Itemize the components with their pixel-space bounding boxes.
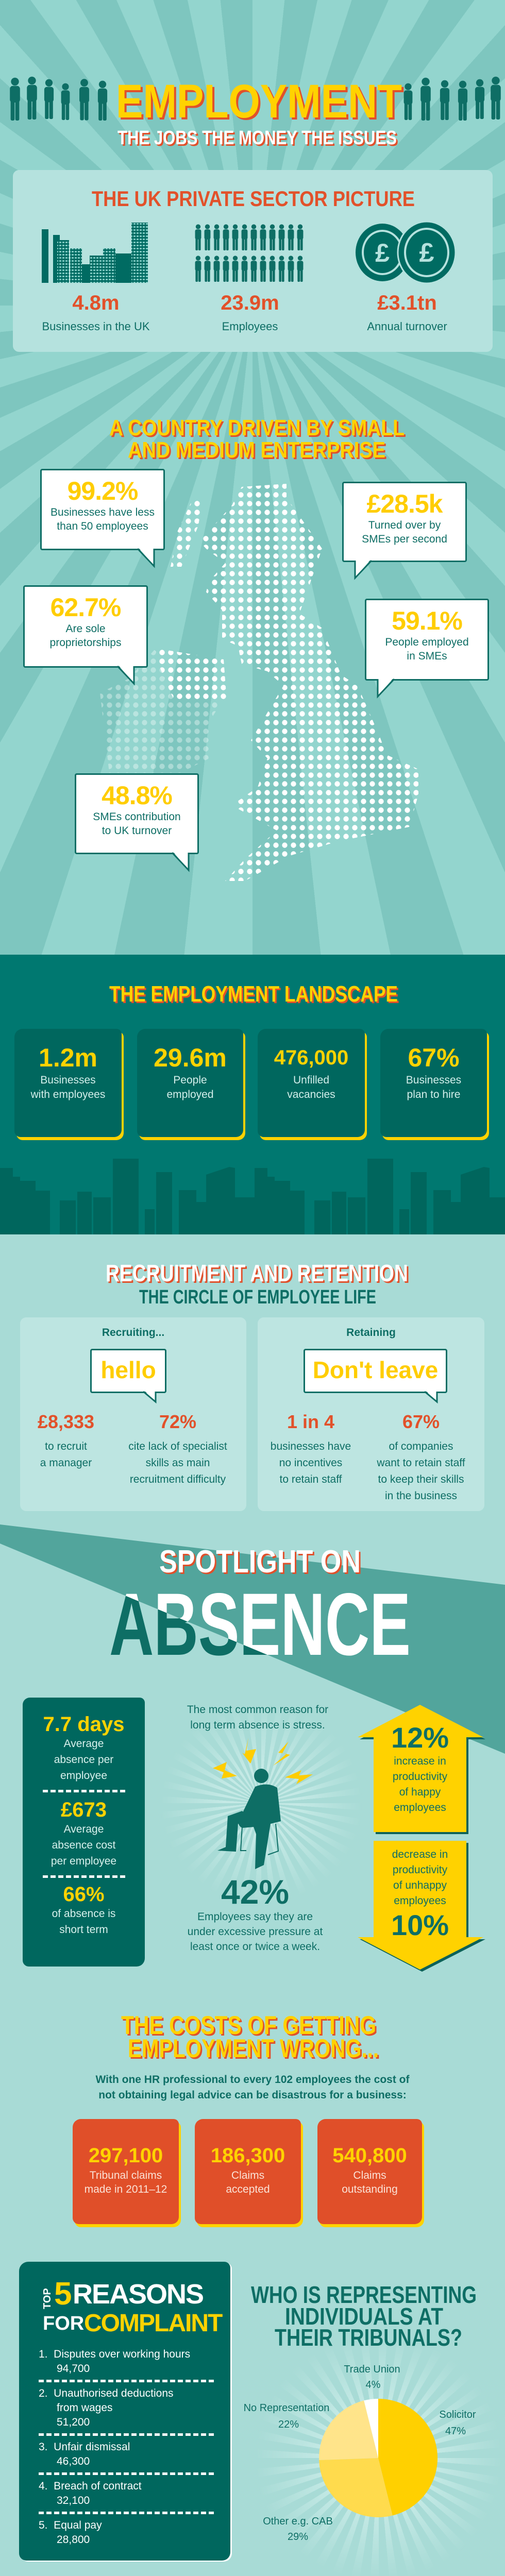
stat: 67% retain (377, 1411, 465, 1502)
heading: who is representing: THEIR TRIBUNALS? (275, 2324, 462, 2351)
heading: who is representing: INDIVIDUALS AT (285, 2303, 443, 2330)
text: stress reason (187, 1704, 328, 1731)
pie labels: Trade Union (344, 2364, 400, 2375)
callout: 62.7%: Are sole (65, 623, 106, 635)
red box: 186,300: 186,300 (211, 2144, 285, 2167)
landscape box: 1.2m: Businesses (40, 1074, 96, 1086)
callout: 62.7%: 62.7% (50, 593, 121, 622)
rays behind pie chart (276, 2355, 482, 2561)
stat: annual turnover: Annual turnover (367, 320, 447, 333)
list: reasons: 51,200 (57, 2416, 90, 2428)
landscape box: 476,000 (258, 1029, 365, 1137)
skyline (0, 1159, 505, 1234)
icon: employees crowd (195, 224, 303, 282)
landscape box: 1.2m: with employees (31, 1089, 105, 1100)
list: reasons: 3. Unfair dismissal (39, 2441, 130, 2453)
stat: £8,333: to recruit (45, 1440, 87, 1452)
red box: 540,800 (317, 2119, 422, 2224)
stat: 67% retain: of companies (389, 1440, 453, 1452)
heading: employment landscape: THE EMPLOYMENT LANDSCAPE (111, 983, 399, 1008)
panel heading: top 5 reasons: 5 (54, 2276, 72, 2312)
heading: a country driven by SMEs: AND MEDIUM ENTERPRISE (128, 437, 385, 463)
stat: 42% (188, 1873, 323, 1953)
label: retaining: Retaining (346, 1327, 396, 1338)
text: HR professional intro (96, 2074, 410, 2101)
stat: 42%: 42% (221, 1873, 289, 1911)
landscape box: 476,000: 476,000 (274, 1046, 348, 1069)
stat: businesses in the UK: 4.8m (72, 292, 120, 314)
callout: 62.7%: proprietorships (50, 637, 121, 649)
people row right of title (404, 77, 501, 121)
pie labels: Solicitor (439, 2409, 476, 2420)
background: employment landscape dark band (0, 955, 505, 1234)
panel: absence stats: £673 (61, 1799, 107, 1821)
heading: costs of getting employment wrong: THE COSTS OF GETTING (123, 2012, 378, 2041)
landscape box: 29.6m (137, 1029, 243, 1137)
panel: absence stats: short term (59, 1924, 108, 1936)
stat: 1 in 4: to retain staff (279, 1473, 342, 1485)
heading: costs of getting employment wrong: EMPLOYMENT WRONG... (129, 2036, 380, 2064)
callout: 48.8%: SMEs contribution (93, 811, 181, 823)
text: 10% decrease: employees (394, 1895, 446, 1907)
text: 10% decrease: productivity (393, 1864, 447, 1876)
landscape box: 476,000: Unfilled (293, 1074, 329, 1086)
landscape box: 29.6m: People (173, 1074, 207, 1086)
stat: employees: 23.9m (221, 292, 279, 314)
red box: 297,100: 297,100 (89, 2144, 163, 2167)
stat: businesses in the UK: Businesses in the UK (42, 320, 150, 333)
list: reasons: 46,300 (57, 2455, 90, 2467)
panel: retaining (258, 1317, 484, 1511)
red box: 186,300: Claims (231, 2170, 264, 2181)
list: reasons: 94,700 (57, 2363, 90, 2375)
arrow: down (10%) (358, 1841, 485, 1972)
title: EMPLOYMENT: EMPLOYMENT (118, 77, 404, 130)
stat: £8,333 (38, 1411, 94, 1469)
panel: absence stats: per employee (51, 1855, 116, 1867)
red box: 297,100 (73, 2119, 179, 2224)
icon: stressed seated person (217, 1769, 281, 1869)
callout: 99.2%: Businesses have less (50, 506, 155, 518)
callout: 59.1%: 59.1% (392, 606, 462, 635)
text: 12% increase: productivity (393, 1771, 447, 1783)
list: reasons: 5. Equal pay (39, 2519, 102, 2531)
icon: pound coins: £ (375, 239, 390, 267)
callout: 48.8% (75, 773, 199, 854)
stat: employees (221, 292, 279, 333)
red box: 297,100: Tribunal claims (90, 2170, 162, 2181)
landscape box: 67%: 67% (408, 1043, 460, 1072)
landscape box: 67% (380, 1029, 487, 1137)
landscape box: 29.6m: 29.6m (154, 1043, 227, 1072)
red box: 540,800: 540,800 (332, 2144, 407, 2167)
text: 12% increase (391, 1721, 449, 1814)
text: 12% increase: increase in (394, 1755, 446, 1767)
panel: absence stats (23, 1698, 145, 1967)
stat: annual turnover: £3.1tn (377, 292, 437, 314)
text: HR professional intro: With one HR professional to every 102 employees the cost of (96, 2074, 409, 2086)
callout: 62.7% (23, 585, 148, 668)
heading: costs of getting employment wrong (121, 2011, 380, 2064)
pie labels: 47% (445, 2426, 466, 2437)
subheading: circle of employee life: THE CIRCLE OF EMPLOYEE LIFE (139, 1286, 376, 1308)
panel: absence stats: 7.7 days (43, 1713, 124, 1736)
callout: 48.8%: to UK turnover (102, 825, 172, 837)
stat: £8,333: a manager (40, 1457, 92, 1469)
red box: 186,300: accepted (226, 2183, 270, 2195)
stat: £8,333: £8,333 (38, 1411, 94, 1432)
panel: absence stats: absence per (54, 1754, 113, 1766)
map: dotted UK (100, 484, 418, 881)
heading: ABSENCE (111, 1593, 408, 1656)
spotlight beam (0, 1524, 505, 1754)
text: 12% increase: 12% (391, 1721, 449, 1754)
callout: 99.2% (40, 469, 165, 550)
rays behind stressed figure (179, 1721, 343, 1885)
landscape box: 29.6m: employed (166, 1089, 214, 1100)
heading: recruitment and retention: RECRUITMENT AND RETENTION (106, 1260, 408, 1286)
pie labels: 4% (366, 2379, 381, 2391)
subtitle: THE JOBS THE MONEY THE ISSUES (117, 127, 397, 149)
red box: 540,800: outstanding (342, 2183, 398, 2195)
stat: employees: Employees (222, 320, 278, 333)
text: 10% decrease: decrease in (392, 1849, 448, 1860)
stat: 72% (128, 1411, 227, 1485)
text: stress reason: long term absence is stress. (190, 1719, 325, 1731)
panel heading: top 5 reasons (42, 2276, 223, 2337)
list: reasons: 32,100 (57, 2495, 90, 2506)
heading: recruitment and retention: RECRUITMENT AND RETENTION (107, 1261, 410, 1288)
heading: employment landscape: THE EMPLOYMENT LANDSCAPE (109, 981, 398, 1007)
text: HR professional intro: not obtaining legal advice can be disastrous for a business: (98, 2089, 407, 2101)
background: sunburst top section (0, 0, 505, 955)
stat: 72%: recruitment difficulty (130, 1473, 226, 1485)
callout: £28.5k: £28.5k (367, 489, 442, 518)
panel: top 5 reasons for complaint (19, 2262, 230, 2561)
stat: 67% retain: to keep their skills (378, 1473, 464, 1485)
heading: costs of getting employment wrong: THE COSTS OF GETTING (121, 2011, 376, 2040)
list: reasons: 2. Unauthorised deductions (39, 2387, 174, 2399)
stat: 72%: skills as main (146, 1457, 210, 1469)
stat: 42%: under excessive pressure at (188, 1926, 323, 1938)
text: stress reason: The most common reason for (187, 1704, 328, 1716)
pie chart: representation (319, 2399, 437, 2517)
red box: 540,800: Claims (353, 2170, 386, 2181)
landscape box: 67%: plan to hire (407, 1089, 460, 1100)
speech bubble: don't leave: Don't leave (313, 1357, 438, 1383)
text: 12% increase: employees (394, 1802, 446, 1814)
text: 10% decrease: of unhappy (393, 1879, 447, 1891)
list: reasons: 1. Disputes over working hours (39, 2348, 190, 2360)
callout: 99.2%: than 50 employees (57, 520, 148, 532)
list: reasons (39, 2348, 214, 2546)
landscape box: 1.2m: 1.2m (39, 1043, 97, 1072)
landscape box: 67%: Businesses (406, 1074, 461, 1086)
heading: a country driven by SMEs: AND MEDIUM ENTERPRISE (129, 439, 387, 464)
stat: 1 in 4: 1 in 4 (287, 1411, 334, 1432)
speech bubble: don't leave (304, 1349, 447, 1393)
icon: pound coins (356, 222, 456, 283)
arrow: up (12%) (358, 1705, 485, 1834)
pie labels: 22% (278, 2419, 299, 2430)
title: EMPLOYMENT: EMPLOYMENT (116, 75, 402, 128)
pie labels: 29% (288, 2531, 308, 2543)
heading: a country driven by SMEs (109, 415, 406, 464)
panel: absence stats: Average (64, 1823, 104, 1835)
panel: absence stats: 66% (63, 1883, 105, 1906)
stat: annual turnover (367, 292, 447, 333)
speech bubble: hello: hello (100, 1357, 156, 1383)
stat: 67% retain: in the business (385, 1490, 457, 1502)
callout: 59.1%: People employed (385, 636, 469, 648)
heading: costs of getting employment wrong: EMPLOYMENT WRONG... (128, 2034, 379, 2063)
stat: 72%: cite lack of specialist (128, 1440, 227, 1452)
list: reasons: 28,800 (57, 2534, 90, 2546)
callout: 99.2%: 99.2% (68, 477, 138, 505)
heading: a country driven by SMEs: A COUNTRY DRIVEN BY SMALL (109, 415, 405, 440)
text: 10% decrease (391, 1849, 449, 1941)
landscape box: 476,000: vacancies (287, 1089, 335, 1100)
icon: lightning bolts (213, 1738, 313, 1784)
heading: spotlight on: SPOTLIGHT ON (161, 1546, 362, 1581)
stat: 67% retain: want to retain staff (377, 1457, 465, 1469)
text: 12% increase: of happy (399, 1786, 441, 1798)
subtitle: THE JOBS THE MONEY THE ISSUES (119, 129, 398, 150)
list: reasons: 4. Breach of contract (39, 2480, 142, 2492)
heading: UK private sector picture: THE UK PRIVATE SECTOR PICTURE (92, 187, 415, 211)
landscape box: 1.2m (14, 1029, 122, 1137)
panel heading: top 5 reasons: FOR (43, 2313, 84, 2334)
speech bubble: hello (90, 1349, 166, 1393)
people row left of title (10, 77, 107, 121)
panel: UK private sector (13, 170, 493, 352)
heading: who is representing (251, 2281, 477, 2351)
panel heading: top 5 reasons: TOP (42, 2288, 53, 2309)
stat: 67% retain: 67% (402, 1411, 440, 1432)
callout: 59.1% (365, 599, 489, 681)
red box: 186,300 (195, 2119, 301, 2224)
red box: 297,100: made in 2011–12 (85, 2183, 167, 2195)
text: 10% decrease: 10% (391, 1909, 449, 1941)
panel: absence stats: employee (60, 1770, 107, 1782)
panel heading: top 5 reasons: REASONS (73, 2279, 203, 2310)
pie labels: No Representation (244, 2402, 329, 2414)
label: recruiting: Recruiting... (102, 1327, 164, 1338)
panel heading: top 5 reasons: COMPLAINT (84, 2310, 222, 2337)
pie labels: Other e.g. CAB (263, 2516, 333, 2527)
panel: absence stats: Average (64, 1738, 104, 1750)
stat: 42%: least once or twice a week. (190, 1941, 320, 1953)
stat: 1 in 4: no incentives (279, 1457, 342, 1469)
panel: recruiting (20, 1317, 246, 1511)
icon: pound coins: £ (419, 238, 434, 268)
heading: a country driven by SMEs: A COUNTRY DRIVEN BY SMALL (111, 417, 406, 442)
pie labels (244, 2364, 476, 2543)
icon: buildings (42, 223, 148, 283)
callout: 48.8%: 48.8% (102, 781, 172, 810)
panel: absence stats: absence cost (52, 1839, 115, 1851)
stat: 42%: Employees say they are (197, 1911, 313, 1923)
stat: 1 in 4: businesses have (271, 1440, 351, 1452)
stat: businesses in the UK (42, 292, 150, 333)
callout: 59.1%: in SMEs (407, 650, 447, 662)
callout: £28.5k: Turned over by (368, 519, 441, 531)
stat: 1 in 4 (271, 1411, 351, 1485)
callout: £28.5k: SMEs per second (362, 533, 447, 545)
panel: absence stats: of absence is (52, 1908, 115, 1920)
list: reasons: from wages (57, 2402, 113, 2414)
heading: spotlight on: SPOTLIGHT ON (159, 1544, 361, 1580)
stat: 72%: 72% (159, 1411, 196, 1432)
callout: £28.5k (342, 482, 467, 562)
